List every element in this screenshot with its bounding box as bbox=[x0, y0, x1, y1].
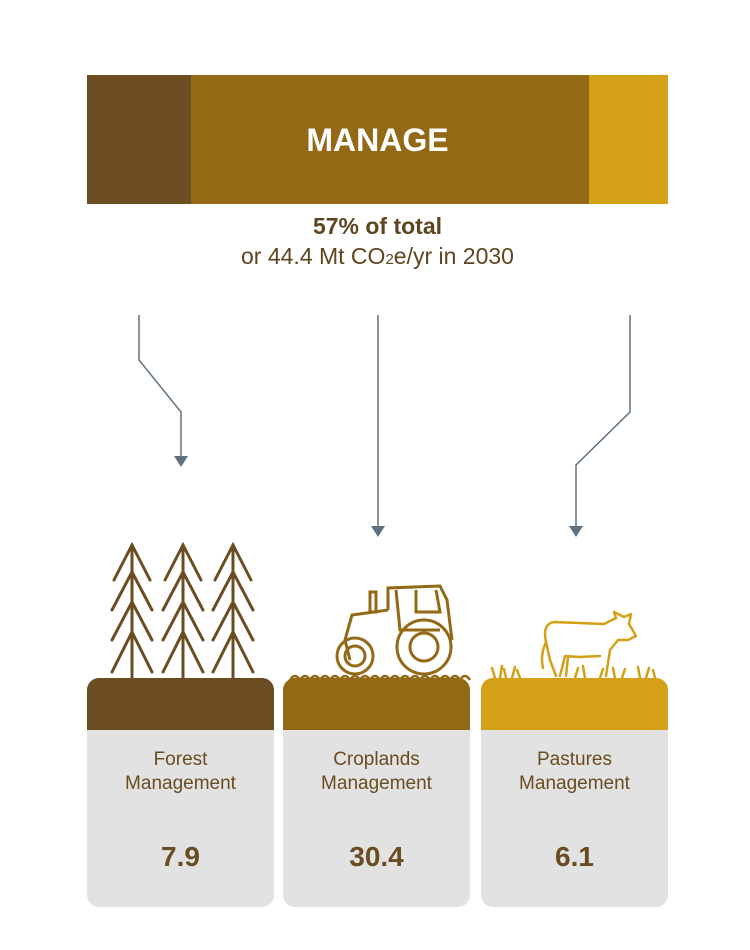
arrow: croplands bbox=[377, 315, 379, 526]
subtitle bbox=[241, 213, 514, 269]
subtitle: or 44.4 Mt CO2e/yr in 2030 bbox=[241, 243, 514, 269]
label forest: Management bbox=[125, 773, 236, 794]
card: pastures bbox=[481, 678, 668, 907]
arrow: forest bbox=[139, 315, 181, 456]
subtitle: 57% of total bbox=[313, 213, 442, 239]
icon: cow bbox=[492, 612, 655, 678]
value pastures: 6.1 bbox=[555, 841, 594, 872]
label croplands: Croplands bbox=[333, 749, 420, 770]
value croplands: 30.4 bbox=[349, 841, 404, 872]
value forest: 7.9 bbox=[161, 841, 200, 872]
label forest: Forest bbox=[154, 749, 207, 770]
card: croplands bbox=[283, 678, 470, 907]
label croplands: Management bbox=[321, 773, 432, 794]
arrow: pastures bbox=[576, 315, 630, 526]
label pastures: Management bbox=[519, 773, 630, 794]
label pastures: Pastures bbox=[537, 749, 612, 770]
label forest bbox=[125, 749, 236, 794]
card: forest bbox=[87, 678, 274, 907]
label pastures bbox=[519, 749, 630, 794]
bar title: MANAGE bbox=[306, 122, 449, 158]
icon: tractor bbox=[290, 586, 470, 680]
icon: trees bbox=[112, 545, 253, 680]
label croplands bbox=[321, 749, 432, 794]
header bar bbox=[87, 75, 668, 204]
